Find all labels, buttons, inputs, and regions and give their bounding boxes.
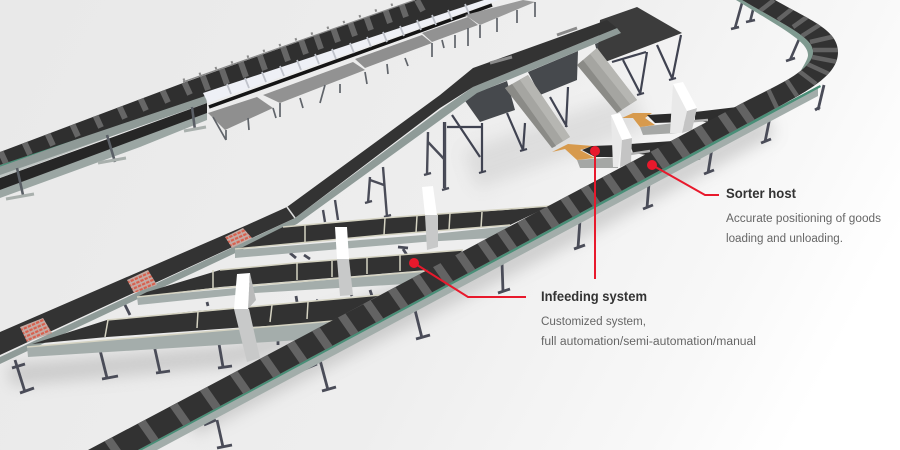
lower belt (0, 103, 207, 190)
dark panels under platform (463, 38, 610, 122)
incline conveyor (0, 20, 621, 364)
callout: sorter host (647, 160, 881, 245)
floor shadows (10, 110, 770, 425)
upper right conveyor legs (731, 3, 800, 61)
callout: infeeding system (409, 258, 756, 348)
infeed station B (622, 82, 708, 135)
description: infeeding system (541, 316, 756, 348)
lower side rail (138, 86, 818, 450)
red roller panel 3 (225, 228, 252, 248)
platform top (597, 7, 682, 65)
white column 2 (335, 227, 353, 296)
description: sorter host (726, 213, 881, 245)
packing tables (208, 0, 535, 140)
red roller panel 2 (127, 270, 157, 293)
upper belt slats (0, 0, 423, 164)
infeed conveyor 3 (235, 206, 550, 258)
upper left twin conveyor (0, 0, 490, 199)
infeed conveyor 2 (137, 250, 463, 305)
heading: sorter host: Sorter host (726, 186, 796, 201)
white column 1 (234, 273, 260, 362)
white column 3 (422, 186, 438, 250)
callout line: infeed station (590, 146, 600, 279)
support legs (17, 107, 195, 195)
main conveyor legs (204, 85, 824, 448)
description: infeeding system: Customized system, (541, 316, 646, 328)
infeed station A (552, 113, 650, 168)
white sorting strip (203, 0, 498, 107)
lower belt side rail (0, 112, 207, 198)
curve slats (760, 0, 838, 108)
silver rail (0, 105, 185, 178)
incline legs (323, 122, 449, 222)
upper belt edge rail (183, 0, 415, 82)
platform legs (444, 35, 681, 188)
inner curve rail (736, 0, 813, 72)
heading: infeeding system: Infeeding system (541, 289, 647, 304)
infeed conveyor legs (12, 247, 408, 393)
description: sorter host: loading and unloading. (726, 233, 843, 245)
floor plates (6, 127, 206, 199)
description: sorter host: Accurate positioning of goods (726, 213, 881, 225)
station feed belts (630, 107, 737, 155)
slats (108, 103, 752, 450)
green edge (138, 85, 821, 450)
red roller panel 1 (20, 318, 52, 342)
infeed conveyor 1 (27, 295, 380, 357)
upper belt (0, 0, 490, 165)
description: infeeding system: full automation/semi-automation/manual (541, 336, 756, 348)
chutes (505, 48, 637, 148)
